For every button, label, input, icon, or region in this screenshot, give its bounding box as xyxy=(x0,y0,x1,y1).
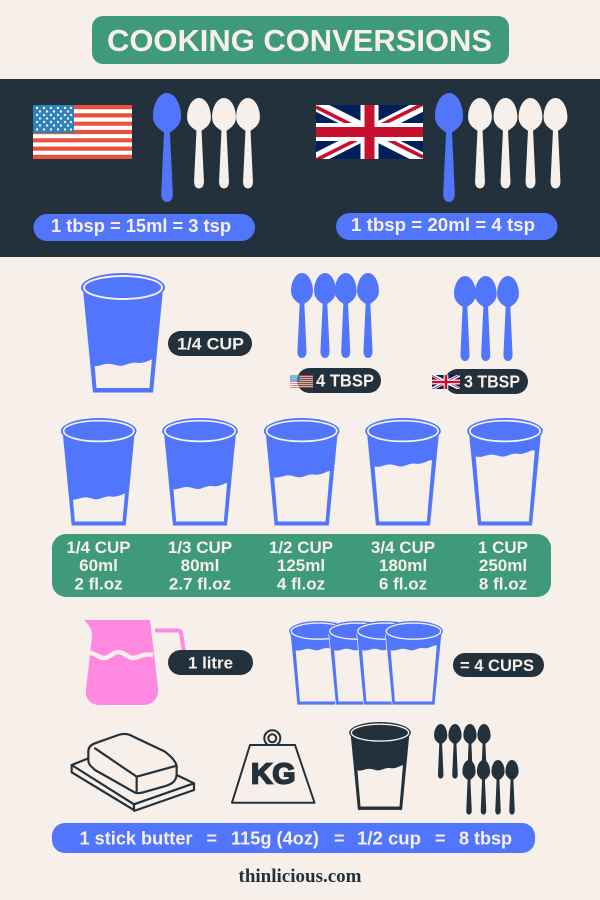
column: 1/4 cup: 1/4 CUP xyxy=(66,538,131,557)
column: 3/4 cup xyxy=(371,538,435,594)
column: 1/3 cup: 80ml xyxy=(181,556,219,575)
icon: eight dark tablespoons xyxy=(434,724,519,814)
title: COOKING CONVERSIONS xyxy=(107,24,492,58)
label: equals 4 cups: = 4 CUPS xyxy=(460,656,534,675)
icon: cup 1/2 xyxy=(264,418,340,526)
label: equals 4 cups xyxy=(453,653,544,677)
column: 1 cup xyxy=(478,538,528,594)
icon: US flag xyxy=(33,105,132,159)
UK conversion pill xyxy=(336,213,558,240)
column: 3/4 cup: 6 fl.oz xyxy=(379,574,427,594)
footer brand: thinlicious.com xyxy=(238,866,362,887)
US conversion pill: 1 tbsp = 15ml = 3 tsp xyxy=(51,216,231,236)
column: 1/3 cup: 2.7 fl.oz xyxy=(169,574,231,594)
butter equivalence pill: = xyxy=(435,828,446,848)
panel: cup conversion table xyxy=(52,534,551,597)
column: 1/2 cup: 125ml xyxy=(277,556,325,575)
column: 1/2 cup xyxy=(269,538,333,594)
column: 1 cup: 250ml xyxy=(479,556,527,575)
butter equivalence pill: 115g (4oz) xyxy=(231,828,319,848)
icon: UK flag xyxy=(316,104,423,160)
column: 1/3 cup: 1/3 CUP xyxy=(168,538,232,557)
icon: cup 1/3 xyxy=(162,418,238,526)
icon: cup 3/4 xyxy=(365,418,441,526)
column: 1/2 cup: 4 fl.oz xyxy=(277,574,325,594)
butter equivalence pill: 1 stick butter xyxy=(80,828,192,848)
label: 3 tbsp UK: 3 TBSP xyxy=(464,372,520,392)
column: 1/4 cup: 2 fl.oz xyxy=(74,574,123,594)
column: 1 cup: 1 CUP xyxy=(478,538,528,557)
icon: cup 1 xyxy=(467,418,543,526)
icon: KG weight xyxy=(232,730,314,803)
column: 1/4 cup xyxy=(66,538,131,594)
icon: pink measuring jug xyxy=(84,620,184,705)
UK conversion pill: 1 tbsp = 20ml = 4 tsp xyxy=(351,215,535,235)
icon: stick of butter on dish xyxy=(72,734,194,811)
icon: four US tablespoons xyxy=(291,273,379,358)
column: 1/2 cup: 1/2 CUP xyxy=(269,538,333,557)
US conversion pill xyxy=(34,214,255,241)
column: 1/4 cup: 60ml xyxy=(79,556,118,575)
label: 4 tbsp US xyxy=(290,368,381,393)
label: 3 tbsp UK xyxy=(432,369,528,394)
icon: KG weight: KG xyxy=(251,758,296,790)
butter equivalence pill: = xyxy=(334,828,345,848)
column: 1 cup: 8 fl.oz xyxy=(479,574,527,594)
icon: UK tablespoon and teaspoons xyxy=(435,93,567,202)
panel: US and UK tablespoon definitions xyxy=(0,79,600,257)
butter equivalence pill: = xyxy=(206,828,217,848)
butter equivalence pill xyxy=(52,823,535,853)
icon: four cups xyxy=(289,621,443,705)
butter equivalence pill: 1/2 cup xyxy=(357,828,421,848)
label: 1/4 cup: 1/4 CUP xyxy=(177,334,244,354)
icon: three UK tablespoons xyxy=(454,276,519,361)
column: 1/3 cup xyxy=(168,538,232,594)
title xyxy=(92,16,509,64)
column: 3/4 cup: 180ml xyxy=(379,556,427,575)
label: 1 litre xyxy=(168,650,253,675)
icon: cup 1/4 xyxy=(60,418,136,526)
icon: large quarter cup xyxy=(81,273,165,392)
icon: US tablespoon and teaspoons xyxy=(153,93,260,202)
label: 4 tbsp US: 4 TBSP xyxy=(316,370,374,390)
column: 3/4 cup: 3/4 CUP xyxy=(371,538,435,557)
label: 1/4 cup xyxy=(168,331,252,356)
butter equivalence pill: 8 tbsp xyxy=(459,828,512,848)
icon: half cup dark xyxy=(349,722,411,810)
label: 1 litre: 1 litre xyxy=(188,654,233,672)
